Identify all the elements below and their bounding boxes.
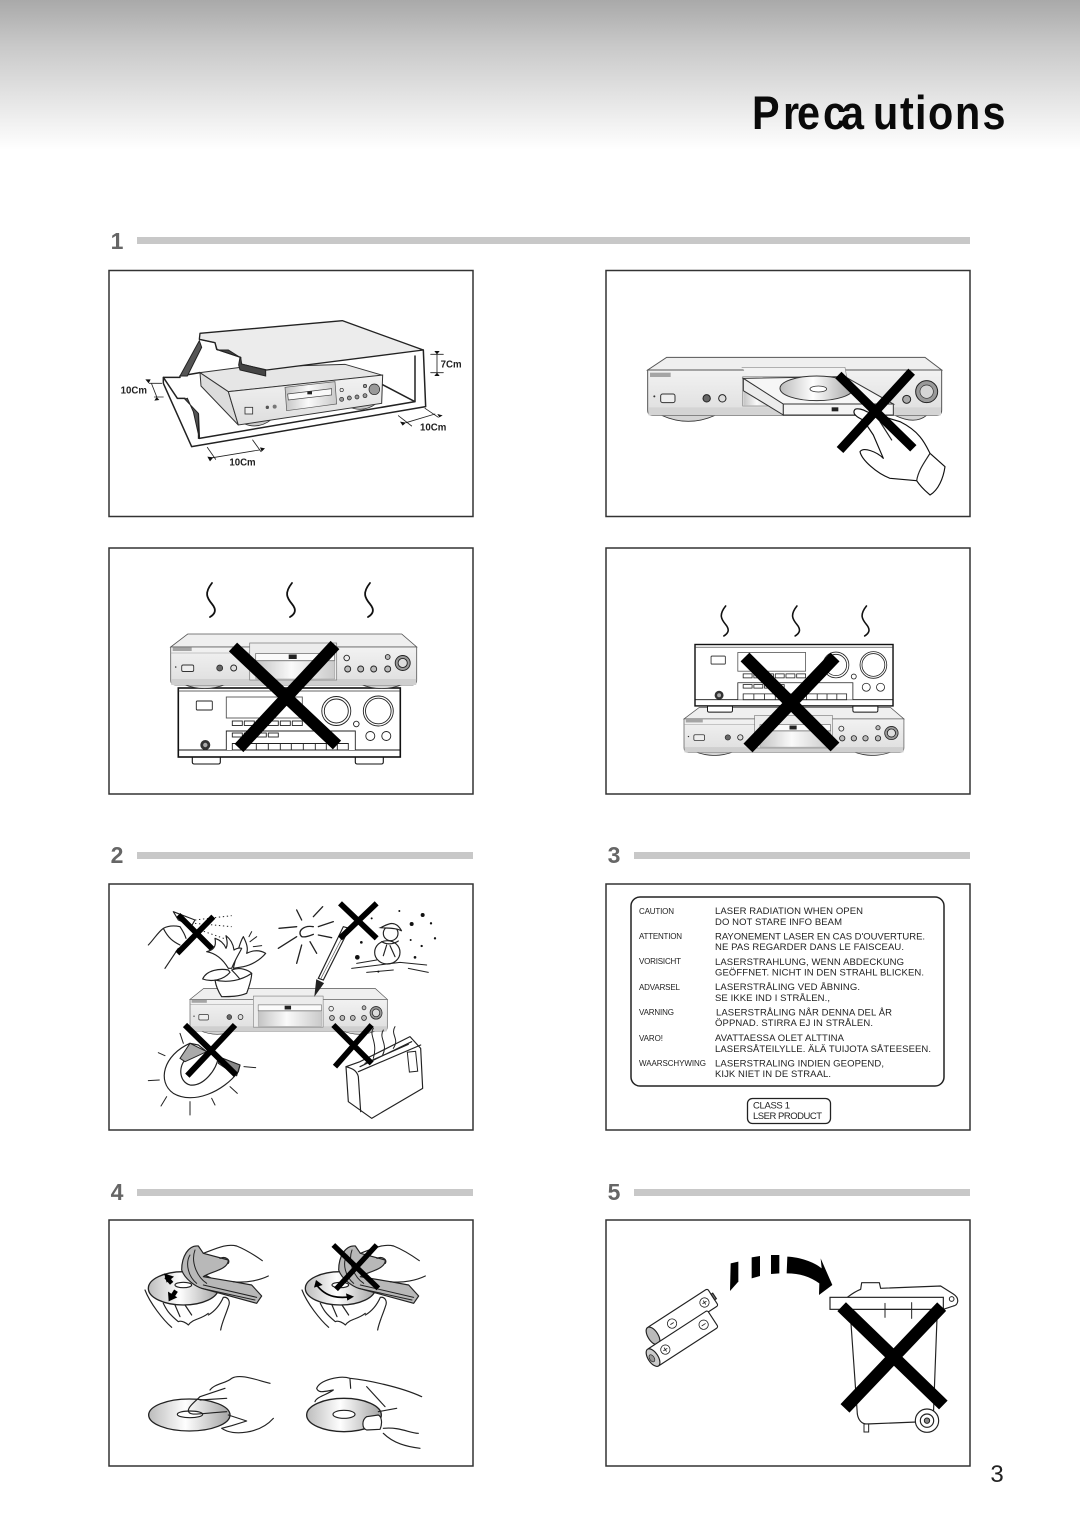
icon: wheelie bin xyxy=(830,1283,958,1432)
warning text box: KIJK NIET IN DE STRAAL. xyxy=(715,1069,831,1080)
icon: batteries xyxy=(643,1288,720,1369)
title: Precautions xyxy=(752,88,1006,140)
icon: wipe disc radially xyxy=(145,1245,268,1330)
icon: finger touching disc surface xyxy=(149,1377,273,1433)
cross: spray xyxy=(177,915,215,953)
warning text box: ADVARSEL xyxy=(639,983,681,992)
dimension: 7cm xyxy=(431,351,462,376)
class 1 label: CLASS 1 xyxy=(753,1100,790,1112)
panel: disc handling xyxy=(109,1220,473,1466)
icon: dashed curved arrow xyxy=(730,1255,832,1295)
icon: sun xyxy=(278,907,333,963)
warning text box: VORISICHT xyxy=(639,957,681,966)
warning text box: AVATTAESSA OLET ALTTINA xyxy=(715,1033,845,1044)
section 3 heading: 3 xyxy=(608,842,620,868)
icon: snowman xyxy=(352,910,436,973)
icon: heater xyxy=(346,1027,423,1118)
panel: do not touch disc tray xyxy=(606,270,970,516)
warning text box: GEÖFFNET. NICHT IN DEN STRAHL BLICKEN. xyxy=(715,968,924,978)
dimension: left 10cm: 10Cm xyxy=(121,386,147,397)
section 2 heading: 2 xyxy=(111,842,123,868)
dimension: left 10cm xyxy=(121,379,163,401)
panel: amplifier stacked on player xyxy=(606,548,970,794)
header gradient band xyxy=(0,0,1080,150)
dimension: bottom 10cm: 10Cm xyxy=(229,458,256,469)
icon: hand pressing tray xyxy=(854,409,945,495)
cross: do not bin batteries xyxy=(842,1307,943,1408)
icon: thermometer xyxy=(315,927,349,995)
dimension: right 10cm: 10Cm xyxy=(420,422,446,433)
warning text box: LASER RADIATION WHEN OPEN xyxy=(715,906,863,917)
amplifier xyxy=(695,644,893,712)
warning text box: LASERSÅTEILYLLE. ÄLÄ TUIJOTA SÅTEESEEN. xyxy=(715,1044,931,1055)
DVD player xyxy=(684,708,904,755)
cross: heater xyxy=(333,1025,372,1067)
section 4 heading xyxy=(111,1179,473,1205)
class 1 label xyxy=(748,1098,830,1124)
warning text box: WAARSCHYWING xyxy=(639,1059,706,1068)
warning text box: CAUTION xyxy=(639,907,674,916)
panel: environment hazards xyxy=(109,884,473,1130)
icon: heat waves xyxy=(207,583,373,617)
dimension: right 10cm xyxy=(398,408,446,433)
cross: do not stack xyxy=(745,657,835,748)
panel: player stacked on amplifier xyxy=(109,548,473,794)
icon: potted plant xyxy=(203,932,266,997)
cross: circular wiping xyxy=(333,1245,378,1289)
cabinet top slab xyxy=(199,321,423,376)
cabinet frame xyxy=(163,341,426,447)
icon: magnet xyxy=(148,1033,256,1115)
warning text box: VARO! xyxy=(639,1034,663,1043)
panel: battery disposal xyxy=(606,1220,970,1466)
panel: ventilation clearance xyxy=(109,270,473,516)
warning text box: NE PAS REGARDER DANS LE FAISCEAU. xyxy=(715,942,904,953)
icon: heat waves xyxy=(721,606,869,636)
player with open tray xyxy=(648,357,942,421)
dimension: 7cm: 7Cm xyxy=(441,359,462,370)
amplifier xyxy=(178,688,400,764)
warning text box: DO NOT STARE INFO BEAM xyxy=(715,917,842,928)
section 3 heading xyxy=(608,842,970,868)
section 4 heading: 4 xyxy=(111,1179,124,1205)
section 1 heading xyxy=(111,228,970,254)
warning text box xyxy=(631,897,944,1086)
warning text box: ÖPPNAD. STIRRA EJ IN STRÅLEN. xyxy=(715,1018,873,1029)
cross: do not stack xyxy=(233,645,337,748)
DVD player xyxy=(190,988,387,1034)
class 1 label: LSER PRODUCT xyxy=(753,1111,822,1122)
warning text box: LASERSTRAHLUNG, WENN ABDECKUNG xyxy=(715,957,904,968)
section 5 heading xyxy=(608,1179,970,1205)
icon: spray bottle and hand xyxy=(148,912,232,968)
section 1 heading: 1 xyxy=(111,228,124,254)
cross: heat and cold xyxy=(340,903,377,938)
panel: laser warning label xyxy=(606,884,970,1130)
cross: do not touch xyxy=(838,372,913,450)
warning text box: LASERSTRÅLING VED ÅBNING. xyxy=(715,982,860,993)
icon: hand holding disc edge xyxy=(307,1377,422,1448)
cross: magnet xyxy=(185,1025,236,1076)
DVD player xyxy=(171,634,417,688)
icon: wipe disc in circles xyxy=(302,1245,425,1330)
warning text box: ATTENTION xyxy=(639,932,682,941)
section 2 heading xyxy=(111,842,473,868)
dimension: bottom 10cm xyxy=(207,440,265,469)
player in cabinet xyxy=(200,364,383,426)
warning text box: VARNING xyxy=(639,1008,674,1017)
warning text box: LASERSTRÅLING NÅR DENNA DEL ÅR xyxy=(716,1008,892,1018)
warning text box: SE IKKE IND I STRÅLEN., xyxy=(715,993,830,1004)
section 5 heading: 5 xyxy=(608,1179,621,1205)
warning text box: RAYONEMENT LASER EN CAS D'OUVERTURE. xyxy=(715,932,925,942)
warning text box: LASERSTRALING INDIEN GEOPEND, xyxy=(715,1058,884,1070)
page number: 3 xyxy=(990,1461,1004,1488)
